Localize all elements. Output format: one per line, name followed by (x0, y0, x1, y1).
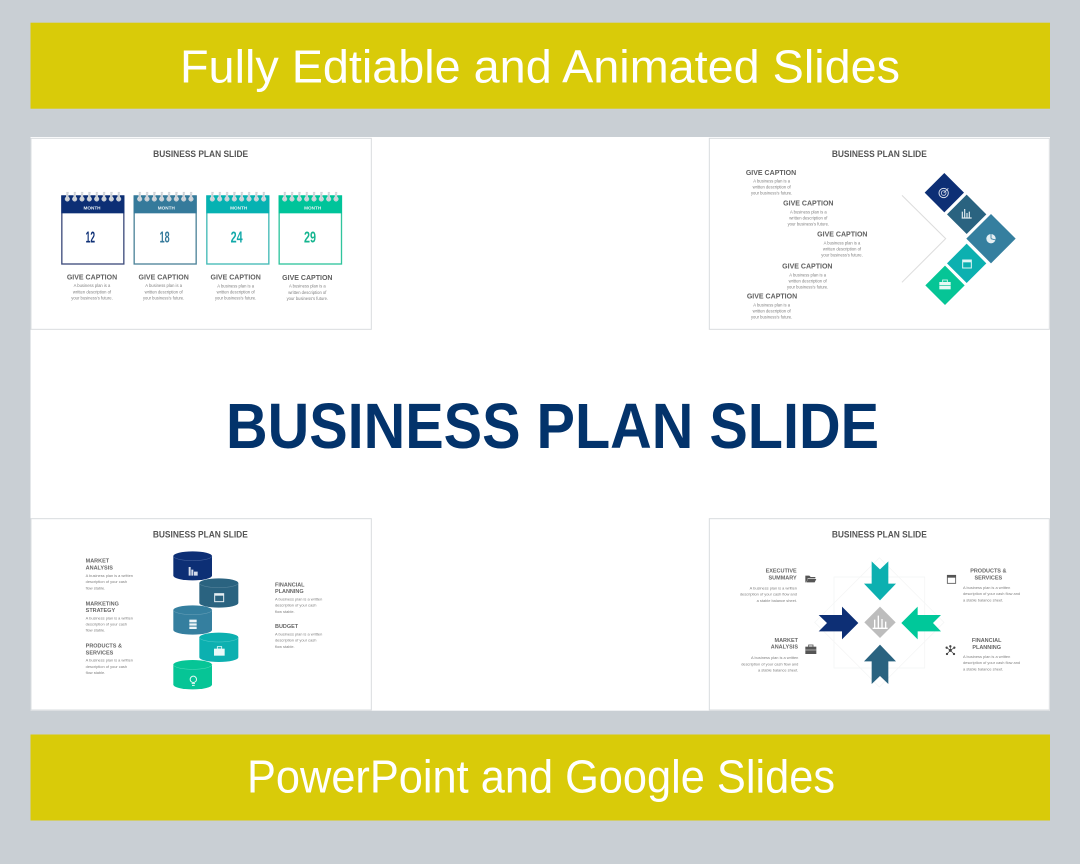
arrow: bottom (864, 645, 896, 684)
slide heading: BUSINESS PLAN SLIDE (832, 529, 927, 539)
text: market analysis: MARKET (86, 559, 110, 565)
slide heading: BUSINESS PLAN SLIDE (153, 149, 248, 159)
caption 4: your business's future. (287, 296, 328, 301)
chevron outline (902, 195, 946, 282)
icon: folder (805, 576, 816, 582)
caption 1: your business's future. (71, 295, 113, 300)
text: marketing strategy: STRATEGY (86, 608, 115, 614)
text: market analysis: a stable balance sheet. (758, 667, 798, 672)
text: market analysis: ANALYSIS (86, 565, 113, 571)
text: financial planning: FINANCIAL (972, 638, 1002, 644)
caption 3: GIVE CAPTION (210, 273, 261, 282)
panel: converging arrows slide (709, 519, 1049, 710)
caption 4: A business plan is a (789, 272, 827, 277)
caption 5: your business's future. (751, 315, 792, 320)
text: marketing strategy: description of your cash (86, 622, 127, 627)
caption 1: GIVE CAPTION (67, 272, 117, 281)
bottom banner: PowerPoint and Google Slides (247, 750, 835, 802)
caption 2: GIVE CAPTION (783, 199, 833, 208)
caption 3: A business plan is a (217, 283, 255, 288)
text: market analysis: MARKET (775, 638, 799, 644)
panel: stacked cylinders slide (31, 519, 371, 710)
caption 2: GIVE CAPTION (138, 272, 189, 281)
icon: network (946, 645, 955, 655)
text: products and services: PRODUCTS & (970, 569, 1006, 575)
caption 3: written description of (823, 247, 862, 252)
caption 2: your business's future. (788, 222, 829, 227)
text: budget: flow stable. (275, 644, 295, 649)
icon: briefcase (805, 645, 816, 654)
text: executive summary: SUMMARY (769, 575, 797, 581)
caption 1: written description of (73, 289, 112, 294)
calendar 18: MONTH (158, 206, 176, 211)
text: market analysis: flow stable. (86, 585, 105, 590)
panel: calendar slide (31, 138, 371, 329)
caption 4 (782, 262, 832, 290)
text: products and services (963, 569, 1020, 602)
calendar 12: MONTH (83, 206, 101, 211)
caption 2 (138, 272, 189, 300)
text: products and services (86, 644, 133, 675)
caption 4: written description of (789, 278, 828, 283)
cylinder 4 (199, 633, 238, 662)
caption 1: written description of (753, 184, 792, 189)
text: executive summary: a stable balance sheet. (757, 598, 797, 603)
text: products and services: flow stable. (86, 670, 105, 675)
text: financial planning: flow stable. (275, 609, 295, 614)
text: financial planning: A business plan is a written (963, 654, 1010, 659)
text: financial planning: description of your cash flow and (963, 660, 1020, 665)
cylinder 2 (199, 578, 238, 608)
text: market analysis: description of your cash flow and (741, 661, 798, 666)
text: products and services: A business plan is a written (86, 658, 133, 663)
text: financial planning: a stable balance sheet. (963, 666, 1003, 671)
text: executive summary: description of your cash flow and (740, 591, 797, 596)
cylinder 3 (173, 605, 212, 635)
text: market analysis: description of your cash (86, 579, 127, 584)
caption 1: GIVE CAPTION (746, 168, 796, 177)
calendar 18 (134, 192, 197, 264)
text: market analysis (86, 559, 133, 590)
text: financial planning: description of your cash (275, 603, 316, 608)
text: products and services: SERVICES (975, 575, 1002, 581)
text: marketing strategy (86, 601, 133, 633)
cylinder 1 (173, 551, 212, 580)
calendar 24: 24 (231, 229, 243, 246)
top banner: Fully Edtiable and Animated Slides (180, 41, 900, 93)
text: products and services: A business plan is a written (963, 585, 1010, 590)
text: budget (275, 624, 322, 649)
caption 4: A business plan is a (289, 284, 326, 289)
arrow: left (819, 607, 858, 639)
bottom banner (30, 734, 1050, 820)
text: market analysis (741, 638, 799, 672)
text: financial planning (963, 638, 1020, 671)
text: financial planning: FINANCIAL (275, 582, 305, 588)
text: financial planning: PLANNING (275, 589, 304, 595)
text: marketing strategy: MARKETING (86, 601, 119, 607)
caption 2: A business plan is a (145, 283, 183, 288)
calendar 29: MONTH (304, 206, 322, 211)
caption 1 (746, 168, 796, 195)
caption 3: A business plan is a (824, 240, 861, 245)
caption 2 (783, 199, 833, 227)
text: budget: description of your cash (275, 638, 316, 643)
cylinder 5 (173, 660, 212, 689)
text: executive summary: EXECUTIVE (766, 569, 797, 575)
caption 3: written description of (217, 290, 256, 295)
caption 2: your business's future. (143, 295, 184, 300)
caption 3 (210, 273, 261, 301)
slide heading: BUSINESS PLAN SLIDE (153, 529, 248, 539)
text: products and services: a stable balance sheet. (963, 597, 1003, 602)
icon: calendar (947, 575, 956, 583)
caption 4: your business's future. (787, 285, 828, 290)
text: products and services: PRODUCTS & (86, 644, 122, 650)
calendar 29 (279, 192, 342, 264)
caption 2: written description of (789, 215, 828, 220)
calendar 24 (206, 192, 269, 264)
diamond: target (925, 173, 964, 212)
text: products and services: description of your cash (86, 664, 127, 669)
text: budget: A business plan is a written (275, 632, 322, 637)
caption 1: your business's future. (751, 190, 792, 195)
caption 3: your business's future. (215, 296, 256, 301)
slide heading: BUSINESS PLAN SLIDE (832, 149, 927, 159)
text: market analysis: ANALYSIS (771, 645, 798, 651)
caption 5: written description of (753, 308, 792, 313)
text: financial planning (275, 582, 322, 614)
main title: BUSINESS PLAN SLIDE (226, 390, 879, 462)
text: market analysis: A business plan is a written (751, 655, 798, 660)
caption 1: A business plan is a (74, 283, 111, 288)
diamond: bar chart (947, 195, 986, 234)
arrow: top (864, 561, 896, 600)
calendar 29: 29 (304, 229, 316, 246)
arrow: right (901, 607, 941, 639)
text: products and services: description of your cash flow and (963, 591, 1020, 596)
caption 5: GIVE CAPTION (747, 292, 797, 301)
top banner (30, 23, 1050, 109)
text: financial planning: A business plan is a written (275, 597, 322, 602)
faint backdrop shapes (815, 558, 944, 687)
caption 4: GIVE CAPTION (282, 273, 332, 282)
caption 3 (817, 230, 867, 258)
calendar 24: MONTH (230, 206, 248, 211)
calendar 12: 12 (86, 229, 95, 246)
calendar 12 (61, 192, 124, 264)
caption 1 (67, 272, 117, 300)
panel: diamond chevron slide (709, 138, 1049, 329)
caption 4 (282, 273, 332, 301)
diamond: briefcase (925, 266, 965, 305)
white centre panel (30, 137, 1050, 711)
text: executive summary: A business plan is a written (750, 585, 797, 590)
calendar 18: 18 (160, 229, 170, 246)
caption 3: your business's future. (821, 253, 863, 258)
caption 4: written description of (288, 290, 327, 295)
text: financial planning: PLANNING (972, 645, 1001, 651)
text: market analysis: A business plan is a written (86, 573, 133, 578)
centre diamond with chart icon (864, 607, 896, 638)
text: marketing strategy: A business plan is a written (86, 615, 133, 620)
text: budget: BUDGET (275, 624, 299, 630)
caption 1: A business plan is a (753, 178, 791, 183)
caption 4: GIVE CAPTION (782, 262, 832, 271)
text: products and services: SERVICES (86, 650, 114, 656)
caption 2: written description of (145, 289, 184, 294)
caption 3: GIVE CAPTION (817, 230, 867, 239)
caption 5: A business plan is a (753, 302, 791, 307)
text: executive summary (740, 569, 797, 603)
caption 5 (747, 292, 797, 320)
diamond: calendar (947, 244, 986, 283)
diamond: pie chart (966, 214, 1016, 263)
caption 2: A business plan is a (790, 209, 827, 214)
text: marketing strategy: flow stable. (86, 628, 105, 633)
